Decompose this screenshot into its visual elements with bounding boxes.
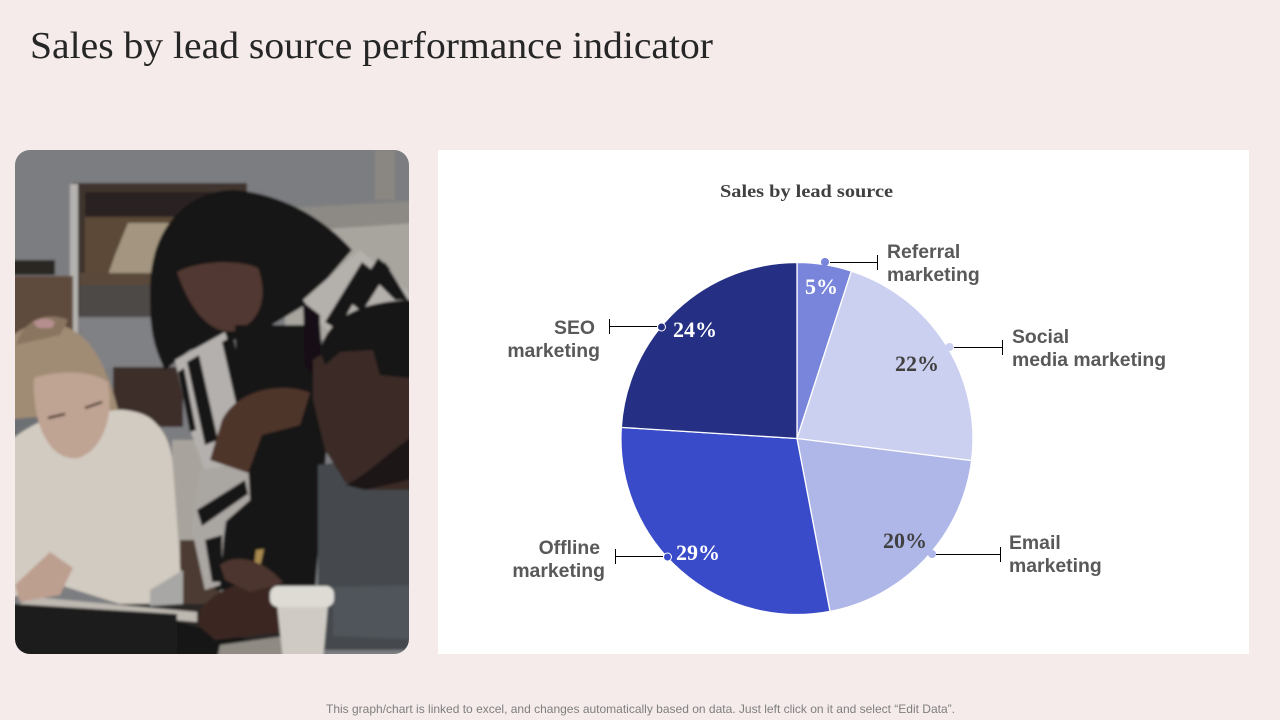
slice: offline 29% [621,427,830,615]
callout: social media marketing: media marketing [1012,349,1166,371]
slice: referral 5% [797,262,851,438]
sub: woman standing [150,190,430,590]
sub: coffee cup [270,586,334,660]
callout: email marketing: marketing [1009,555,1102,577]
footnote: This graph/chart is linked to excel, and changes automatically based on data. Just left click on it and select “Edit Data”. [326,702,955,716]
photo: three colleagues reviewing work at a desk [15,150,409,654]
title: Sales by lead source performance indicator [30,25,713,67]
callout: SEO marketing: SEO [554,317,595,339]
callout: social media marketing: Social [1012,326,1069,348]
percentage labels: 5% [805,274,838,299]
callout: email marketing: Email [1009,532,1061,554]
percentage labels: 24% [673,317,717,342]
slice: email 20% [797,438,972,611]
chart title: Sales by lead source [720,181,893,201]
percentage labels [673,274,939,565]
callout: email marketing [928,532,1102,577]
callout: referral marketing [821,241,980,286]
percentage labels: 22% [895,351,939,376]
callout: SEO marketing [507,317,666,362]
callout: SEO marketing: marketing [507,340,600,362]
callout: social media marketing [946,326,1166,371]
callout: offline marketing: Offline [539,537,600,559]
pie chart [621,262,973,615]
chart panel background [438,150,1249,654]
sub: man seated at right [198,298,409,654]
callout: offline marketing [512,537,672,582]
sub: woman seated at left [0,316,183,606]
sub: desk and laptop [15,596,282,654]
percentage labels: 20% [883,528,927,553]
callout: referral marketing: marketing [887,264,980,286]
callout: offline marketing: marketing [512,560,605,582]
percentage labels: 29% [676,540,720,565]
callout: referral marketing: Referral [887,241,960,263]
slice: SEO 24% [621,262,797,438]
slice: social media 22% [797,271,973,461]
